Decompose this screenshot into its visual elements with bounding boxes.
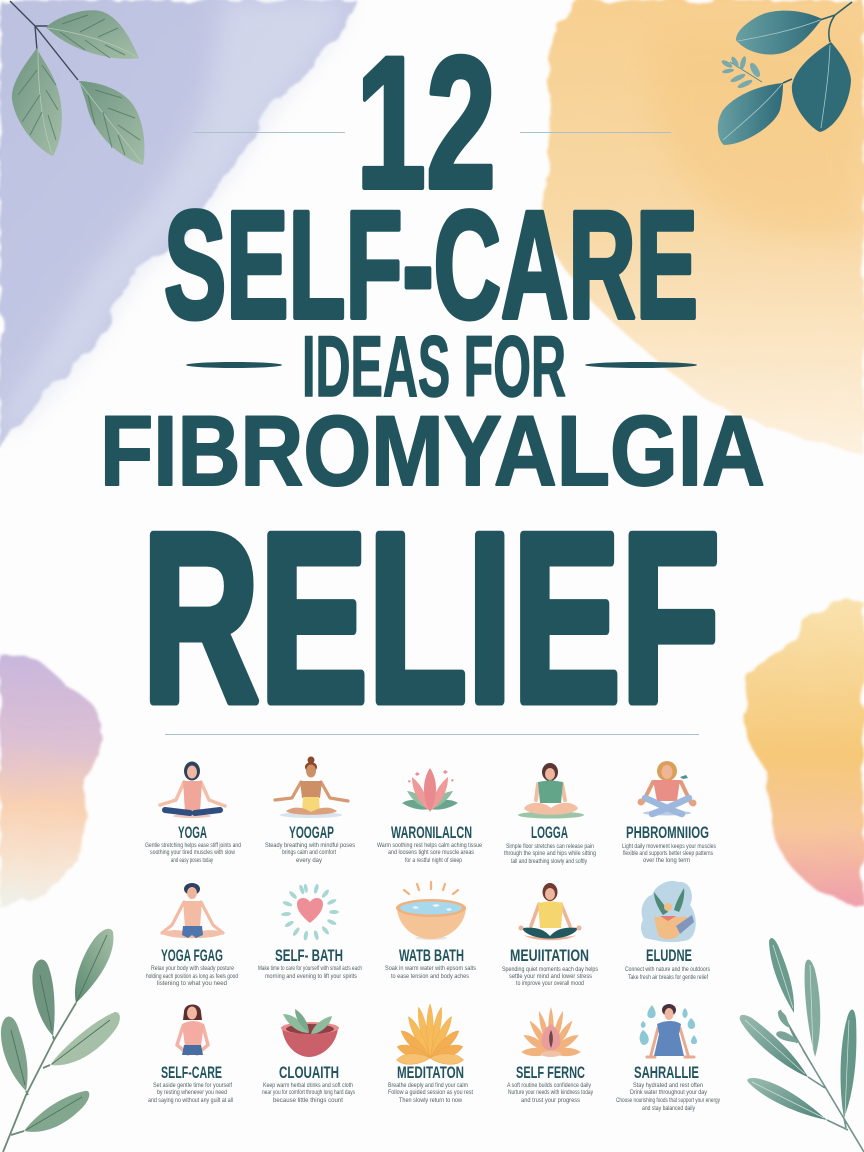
description: A soft routine builds confidence daily (507, 1083, 591, 1089)
label: LOGGA (531, 824, 568, 842)
description: and saying no without any guilt at all (148, 1098, 233, 1104)
icon: bowl of water (396, 882, 466, 940)
label: SELF-CARE (161, 1064, 222, 1082)
description: Connect with nature and the outdoors (625, 967, 710, 973)
description: Set aside gentle time for yourself (153, 1083, 232, 1089)
decorative rules (165, 132, 699, 734)
idea 14: self fern (507, 1007, 593, 1104)
description: settle your mind and lower stress (509, 974, 592, 980)
label: WARONILALCN (391, 824, 472, 842)
icon: man seated with blue shorts (160, 883, 225, 938)
description: for a restful night of sleep (405, 858, 463, 864)
description (507, 1083, 593, 1104)
icon: woman in green shirt (518, 763, 584, 818)
description: Gentle stretching helps ease stiff joints and (145, 843, 241, 849)
icon: figure with blue clouds (641, 881, 696, 942)
leaves: top left branch (10, 1, 144, 165)
description: holding each position as long as feels good (146, 974, 238, 980)
description: over the long term (643, 858, 690, 864)
description: near you for comfort through long hard days (262, 1090, 355, 1096)
description (258, 966, 362, 980)
description: Follow a guided session as you rest (388, 1090, 473, 1096)
description: soothing your tired muscles with slow (150, 850, 236, 856)
idea 8: warm bath (385, 882, 476, 980)
description: Warm soothing rest helps calm aching tissue (377, 843, 483, 849)
description: to improve your overall mood (516, 981, 584, 987)
description: Light daily movement keeps your muscles (622, 844, 716, 850)
description: Keep warm herbal drinks and soft cloth (263, 1083, 353, 1089)
description: Nurture your needs with kindness today (508, 1090, 593, 1096)
description: to ease tension and body aches (391, 974, 469, 980)
description: Then slowly return to now (399, 1098, 463, 1104)
icon: woman in yellow shirt meditating (518, 883, 582, 940)
description (504, 844, 596, 865)
idea 4: logga (504, 763, 596, 865)
idea 13: meditation fan (388, 1004, 473, 1104)
description (377, 843, 483, 864)
label: ELUDNE (646, 947, 692, 965)
description: Take fresh air breaks for gentle relief (628, 975, 708, 981)
icon: peach petal flower (521, 1007, 581, 1057)
label: SELF- BATH (275, 947, 343, 965)
description: Soak in warm water with epsom salts (385, 966, 476, 972)
title: FIBROMYALGIA: FIBROMYALGIA (100, 395, 765, 506)
description: morning and evening to lift your spirits (265, 974, 357, 980)
description: every day (296, 858, 322, 864)
description: and stay balanced daily (642, 1106, 695, 1112)
description: listening to what you need (157, 981, 227, 987)
description: and easy poses today (171, 858, 213, 864)
description (388, 1083, 473, 1104)
icon: seated figure with bun (275, 756, 348, 818)
description: Choose nourishing foods that support your energy (616, 1098, 720, 1104)
label: MEDITATON (397, 1064, 464, 1082)
label: YOGA (178, 824, 207, 842)
description (625, 967, 710, 981)
description (502, 967, 598, 987)
icon: woman with blue legs (638, 761, 696, 816)
icon: person in blue dress with droplets (640, 1004, 697, 1057)
description (265, 843, 355, 864)
leaves: top right branch (718, 2, 852, 145)
watercolor: yellow and pink right blob (744, 601, 864, 905)
label: CLOUAITH (279, 1064, 339, 1082)
idea 2: yoogap (265, 756, 355, 864)
label: WATB BATH (399, 947, 464, 965)
label: SAHRALLIE (634, 1064, 699, 1082)
idea 15: sahrallie (616, 1004, 720, 1112)
description (616, 1083, 720, 1112)
leaves: bottom right branch (740, 938, 864, 1152)
idea 3: warm lotus (377, 768, 483, 864)
ornament: right dash (585, 362, 697, 368)
description: brings calm and comfort (282, 850, 336, 856)
description (385, 966, 476, 980)
description: and trust your progress (521, 1098, 580, 1104)
icon: orange fan flower (396, 1004, 464, 1065)
icon: woman in pink top (177, 1004, 208, 1055)
idea 1: yoga (145, 762, 241, 864)
title: IDEAS FOR: IDEAS FOR (302, 319, 566, 415)
description: and loosens tight sore muscle areas (388, 850, 474, 856)
description: Relax your body with steady posture (151, 966, 235, 972)
description: Drink water throughout your day (630, 1090, 707, 1096)
idea 7: self bath (258, 883, 362, 980)
icon: woman in lotus pose (160, 762, 225, 818)
description (622, 844, 716, 864)
label: PHBROMNIIOG (626, 824, 709, 842)
watercolor: orange top right (542, 0, 864, 456)
description (146, 966, 238, 987)
description: by resting whenever you need (157, 1090, 227, 1096)
description: tall and breathing slowly and softly (511, 859, 587, 865)
description: Simple floor stretches can release pain (506, 844, 594, 850)
description: because little things count (273, 1098, 343, 1104)
watercolor: lavender top left (0, 0, 357, 450)
label: SELF FERNC (516, 1064, 585, 1082)
leaves: bottom left branch (1, 929, 120, 1152)
description: Stay hydrated and rest often (633, 1083, 703, 1089)
description: flexible and supports better sleep patterns (623, 851, 713, 857)
label: YOOGAP (289, 824, 334, 842)
idea 9: meditation (502, 883, 598, 987)
icon: lotus flower (402, 768, 458, 812)
description (145, 843, 241, 864)
icon: heart with teal rays (281, 883, 339, 941)
icon: red bowl with leaves (281, 1009, 339, 1057)
label: MEUIITATION (510, 947, 589, 965)
title: 12: 12 (356, 18, 496, 228)
description: Breathe deeply and find your calm (388, 1083, 468, 1089)
ornament: left dash (186, 362, 282, 368)
idea 5: fibromyalgia pose (622, 761, 716, 864)
idea 10: nature figure (625, 881, 710, 981)
description (262, 1083, 355, 1104)
idea 12: cloth bowl (262, 1009, 355, 1104)
description: Steady breathing with mindful poses (265, 843, 355, 849)
description: Spending quiet moments each day helps (502, 967, 598, 973)
description: Make time to care for yourself with small acts each (258, 966, 362, 972)
idea 11: self-care (148, 1004, 233, 1104)
watercolor: lavender and peach left blob (0, 653, 102, 908)
description: through the spine and hips while sitting (504, 851, 596, 857)
description (148, 1083, 233, 1104)
idea 6: yoga focus (146, 883, 238, 987)
label: YOGA FGAG (161, 947, 223, 965)
